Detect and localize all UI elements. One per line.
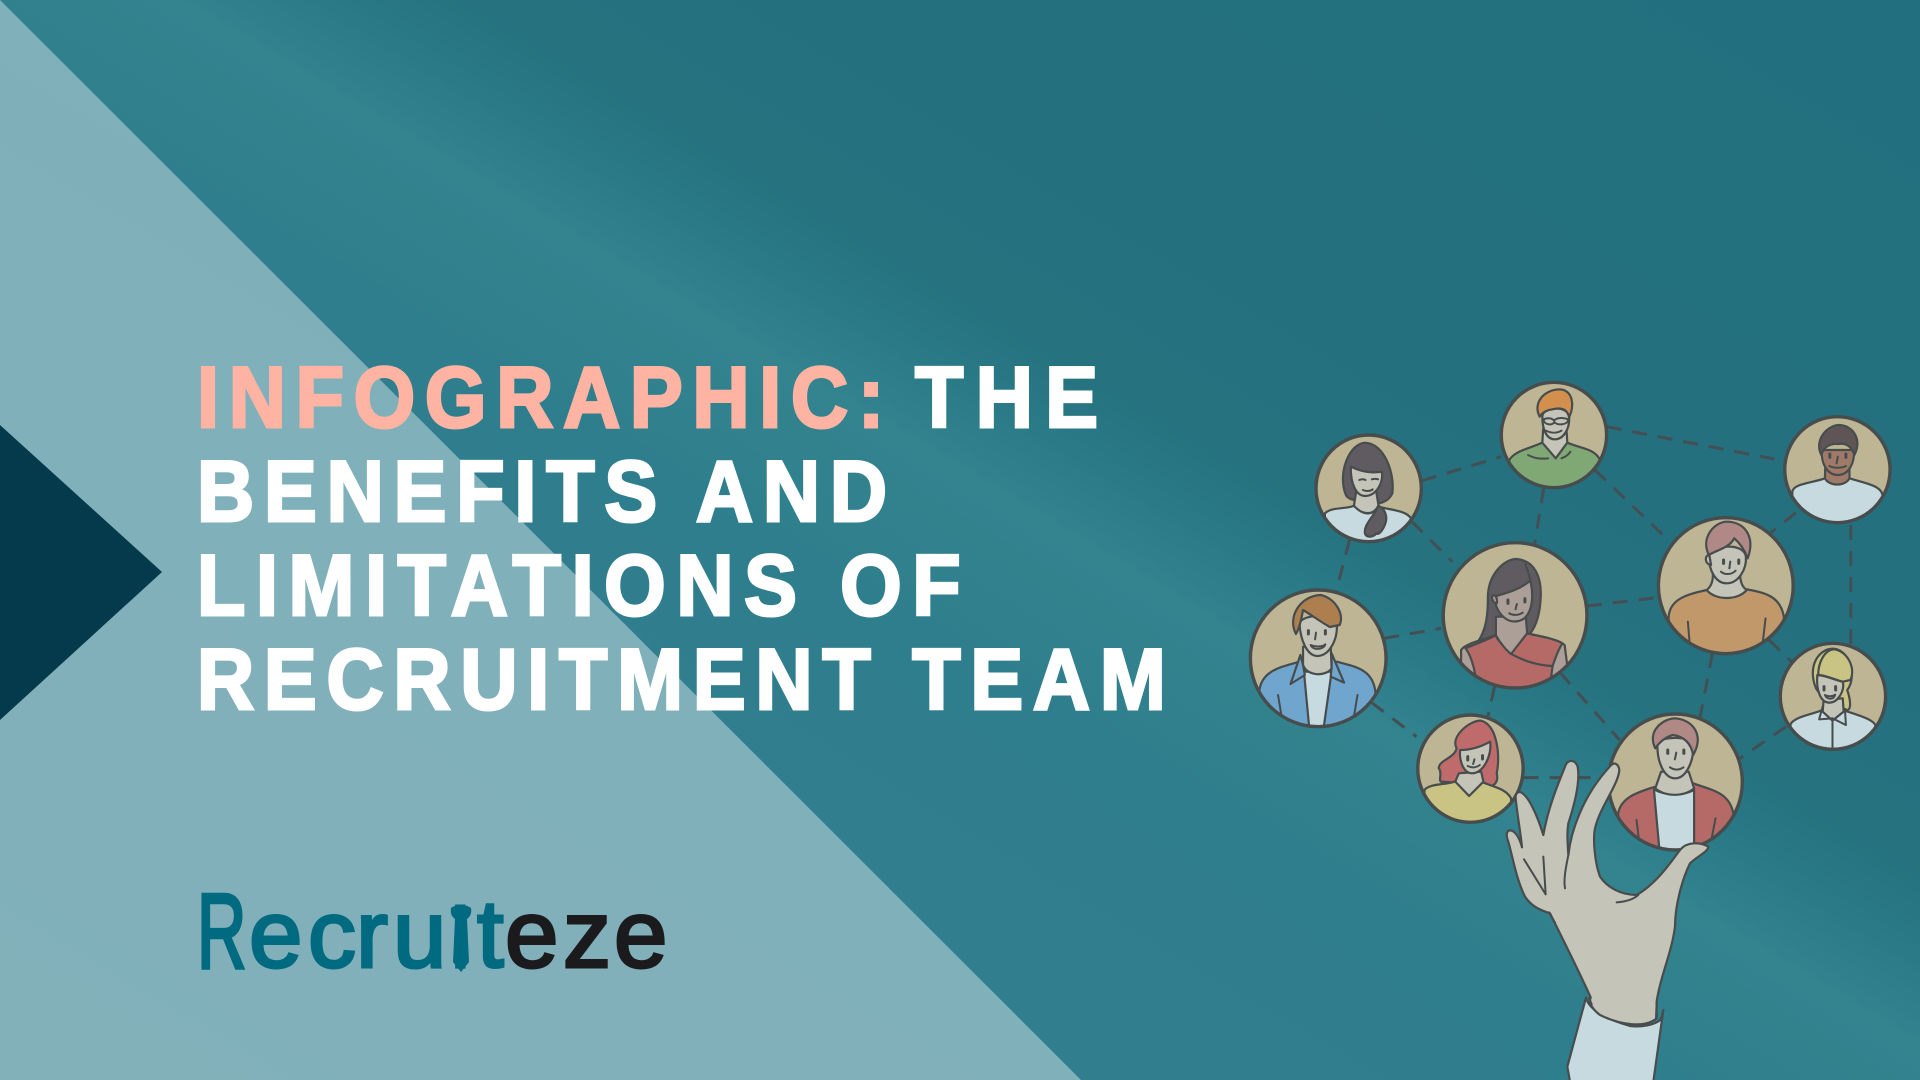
logo: Recruiteze: eze — [505, 881, 667, 988]
avatar: man with dark curly hair — [1785, 417, 1890, 527]
title: INFOGRAPHIC: — [197, 349, 884, 446]
title: RECRUITMENT TEAM — [197, 631, 1166, 728]
avatar: blonde woman in white shirt — [1780, 643, 1886, 752]
avatar: central woman in red dress — [1443, 543, 1587, 690]
network of people illustration — [1250, 382, 1890, 853]
title: LIMITATIONS OF — [197, 537, 961, 634]
avatar: red-haired woman in yellow top — [1418, 715, 1523, 825]
light diagonal triangle panel — [0, 0, 1081, 1080]
avatar: man in red jacket — [1608, 714, 1742, 853]
logo: Recruiteze — [197, 873, 667, 992]
avatar: woman with dark ponytail — [1316, 435, 1421, 543]
hand shape — [1507, 761, 1708, 1024]
logo: Recruiteze: R — [197, 873, 246, 992]
logo: Recruiteze: t — [477, 881, 504, 988]
hand holding avatar — [1507, 761, 1708, 1080]
shirt cuff — [1567, 998, 1663, 1080]
dark arrow marker — [0, 425, 162, 720]
title — [197, 349, 1166, 728]
title: BENEFITS AND — [197, 443, 887, 540]
avatar: man in orange shirt — [1658, 518, 1793, 657]
finger detail lines — [1524, 855, 1657, 1018]
title: THE — [915, 349, 1098, 446]
avatar: man in green shirt with glasses — [1501, 382, 1607, 493]
logo: Recruiteze: ecru — [249, 881, 446, 988]
avatar: man in blue denim shirt — [1250, 590, 1386, 730]
dashed connection lines — [1336, 427, 1851, 778]
logo: Recruiteze: i — [451, 891, 470, 985]
icon: necktie forming the letter i — [451, 905, 471, 972]
